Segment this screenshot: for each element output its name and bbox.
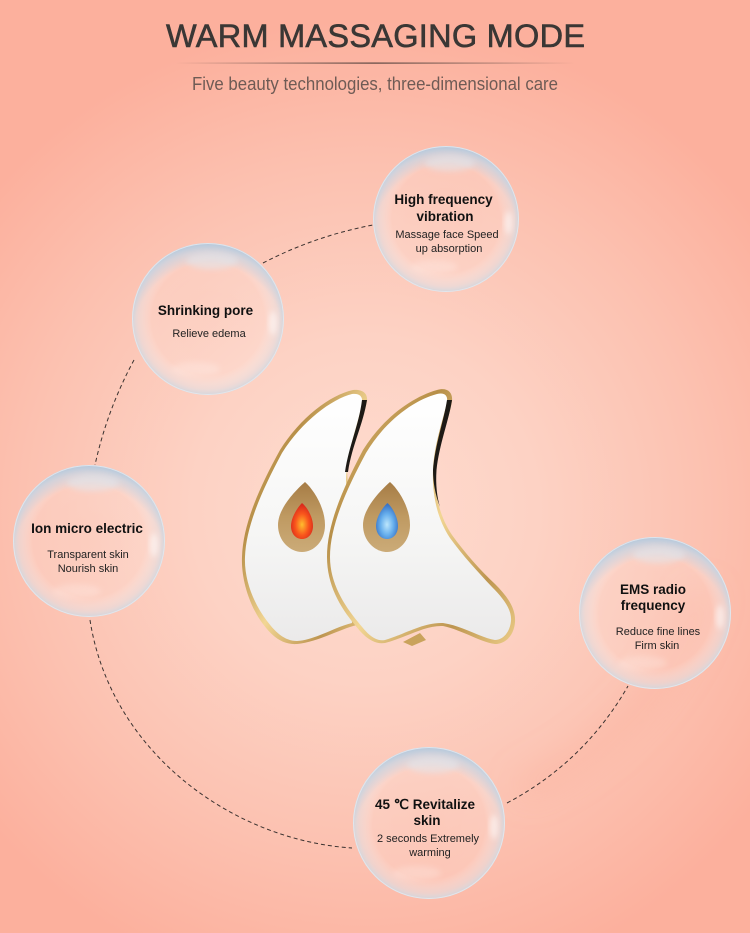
bubble: ion micro electric: Nourish skin — [58, 563, 118, 575]
bubble: high frequency vibration: Massage face Speed — [395, 229, 499, 241]
bubble: 45 C revitalize skin: 45 ℃ Revitalize — [375, 797, 475, 812]
front device with blue light — [327, 389, 515, 644]
bubble: shrinking pore — [132, 243, 284, 395]
bubble: high frequency vibration: vibration — [416, 209, 474, 224]
bubble: shrinking pore: Relieve edema — [172, 328, 247, 340]
bubble: 45 C revitalize skin — [353, 747, 505, 899]
bubble: ion micro electric: Transparent skin — [47, 549, 129, 561]
bubble: EMS radio frequency: EMS radio — [620, 582, 686, 597]
bubble: shrinking pore: Shrinking pore — [158, 303, 254, 318]
decorative water ripples — [520, 590, 705, 790]
bubble: 45 C revitalize skin: skin — [413, 813, 441, 828]
bubble: high frequency vibration: up absorption — [416, 243, 482, 255]
bubble: ion micro electric: Ion micro electric — [31, 521, 143, 536]
bubble: 45 C revitalize skin: warming — [408, 847, 451, 859]
left drop — [278, 482, 325, 552]
product: gua sha devices — [242, 389, 515, 646]
bubble: EMS radio frequency: frequency — [621, 598, 686, 613]
bubble: ion micro electric — [13, 465, 165, 617]
right drop — [363, 482, 410, 552]
title divider — [175, 62, 575, 64]
bubble: EMS radio frequency — [579, 537, 731, 689]
black side band — [345, 400, 367, 472]
black side band — [433, 400, 452, 507]
bubble: high frequency vibration: High frequency — [394, 192, 493, 207]
title: WARM MASSAGING MODE — [166, 18, 585, 54]
bubble: EMS radio frequency: Reduce fine lines — [616, 626, 701, 638]
dashed connector ring — [90, 225, 628, 848]
bubble: 45 C revitalize skin: 2 seconds Extremely — [377, 833, 480, 845]
bubble: EMS radio frequency: Firm skin — [635, 640, 679, 652]
subtitle: Five beauty technologies, three-dimensional care — [192, 74, 558, 94]
connector stub — [403, 633, 426, 646]
back device with red light — [242, 390, 367, 644]
bubble: high frequency vibration — [373, 146, 519, 292]
